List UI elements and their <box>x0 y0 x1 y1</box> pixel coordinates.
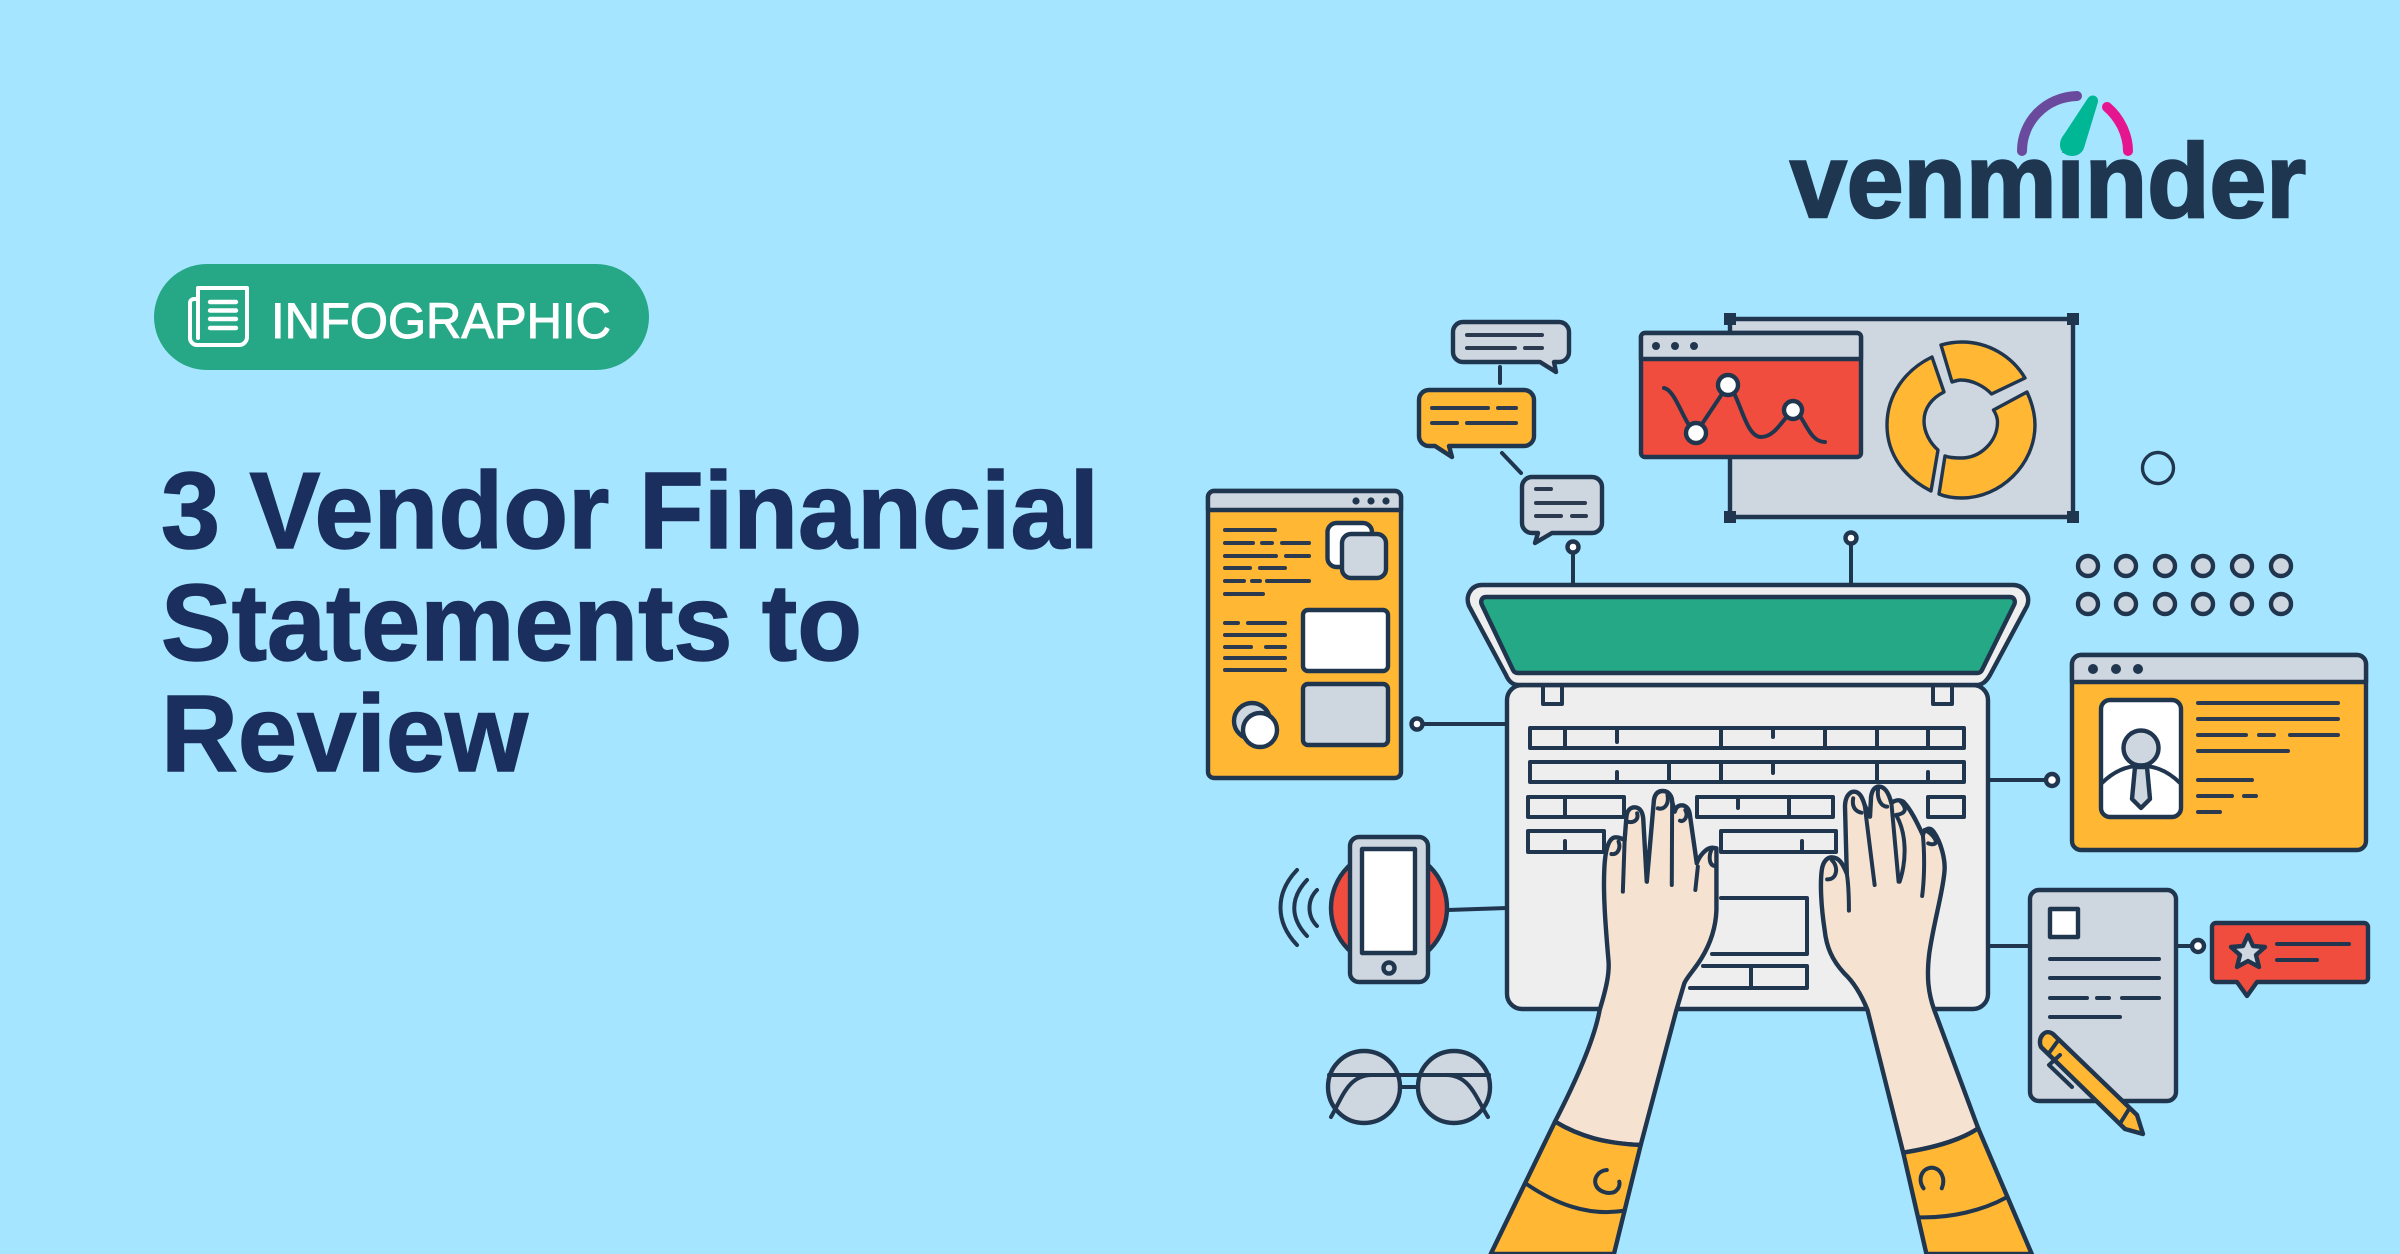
title: Review <box>161 673 528 795</box>
panel: document with pen <box>2030 890 2176 1134</box>
callout: red star bubble <box>2212 923 2368 996</box>
line chart window <box>1641 333 1861 457</box>
panel: chart dashboard <box>1641 313 2079 523</box>
hinges <box>1543 686 1952 704</box>
bubble connectors <box>1500 367 1521 473</box>
speech bubble: yellow <box>1419 390 1534 457</box>
speech bubble: grey top <box>1453 322 1569 372</box>
logo: venminder: venminder <box>1790 123 2306 240</box>
laptop base <box>1507 685 1988 1009</box>
arms and hands <box>1491 787 2032 1254</box>
title: 3 Vendor Financial <box>161 450 1099 572</box>
right arm <box>1821 787 2032 1254</box>
icon: glasses <box>1328 1051 1490 1123</box>
dot grid <box>2078 556 2291 614</box>
trackpad <box>1690 898 1807 988</box>
keyboard <box>1528 728 1964 852</box>
badge: infographic <box>154 264 649 370</box>
left arm <box>1491 791 1716 1254</box>
connector lines <box>1417 544 2192 946</box>
speech bubble: grey lower <box>1522 477 1602 543</box>
title: Statements to <box>161 562 862 684</box>
hollow circle <box>2142 452 2174 484</box>
profile photo <box>2101 700 2181 817</box>
badge: infographic: INFOGRAPHIC <box>271 293 611 349</box>
laptop lid <box>1468 585 2028 685</box>
panel: profile window <box>2072 655 2366 850</box>
laptop screen <box>1481 597 2015 673</box>
donut chart <box>1887 342 2035 498</box>
pin markers <box>1412 532 2204 952</box>
icon: pen <box>2040 1032 2143 1134</box>
panel: yellow document window <box>1208 491 1401 778</box>
title <box>161 450 1099 795</box>
icon: smartphone <box>1280 837 1447 982</box>
laptop <box>1468 585 2028 1009</box>
icon: newspaper <box>190 288 247 345</box>
